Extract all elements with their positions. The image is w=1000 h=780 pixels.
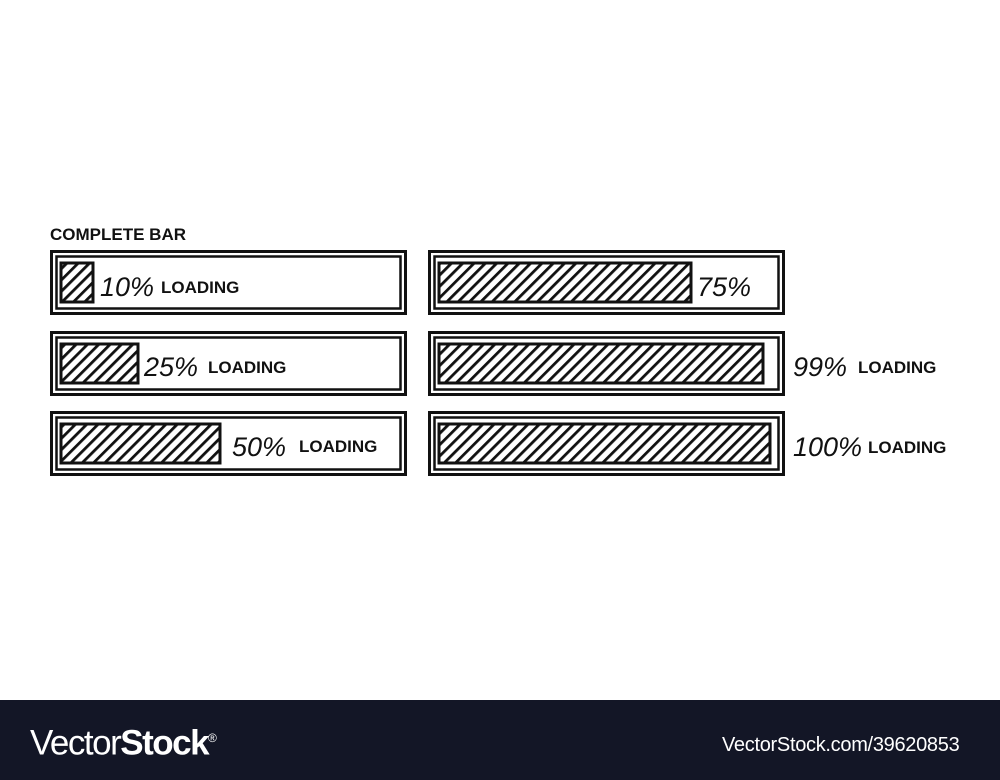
bar: 50%: LOADING xyxy=(299,437,377,456)
footer logo: VectorStock® xyxy=(30,724,215,763)
bar: 10% xyxy=(52,252,406,314)
bar: 75% xyxy=(430,252,784,314)
bar: 100%: LOADING xyxy=(868,438,946,457)
title: COMPLETE BAR xyxy=(50,225,186,244)
bar: 100%: 100% xyxy=(793,432,862,462)
footer bar xyxy=(0,700,1000,780)
footer url: VectorStock.com/39620853 xyxy=(722,734,959,756)
bar: 99% xyxy=(430,332,936,394)
bar: 99%: 99% xyxy=(793,352,847,382)
bar: 50%: 50% xyxy=(232,432,286,462)
bar: 25% xyxy=(52,332,406,394)
bar: 75%: 75% xyxy=(697,272,751,302)
bar: 25%: LOADING xyxy=(208,358,286,377)
bar: 10%: LOADING xyxy=(161,278,239,297)
bar: 99%: LOADING xyxy=(858,358,936,377)
bar: 25%: 25% xyxy=(143,352,198,382)
bar: 10%: 10% xyxy=(100,272,154,302)
bar: 100% xyxy=(430,412,946,474)
bar: 50% xyxy=(52,412,406,474)
